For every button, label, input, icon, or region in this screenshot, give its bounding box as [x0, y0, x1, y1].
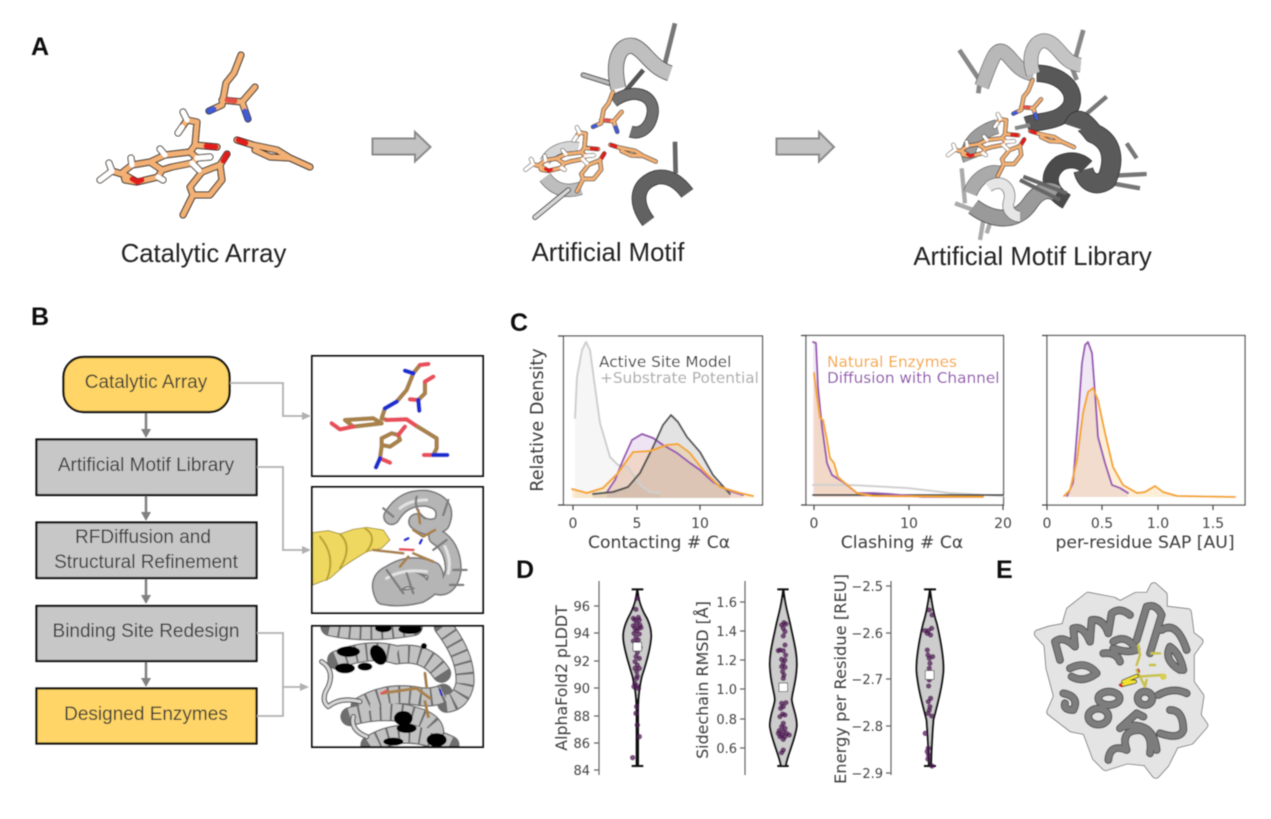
panel A: artificial motif structure — [526, 23, 687, 222]
step: Binding Site Redesign: Binding Site Redesign — [53, 621, 239, 642]
violin: Sidechain RMSD — [693, 581, 797, 775]
step: RFDiffusion and Structural Refinement: Structural Refinement — [54, 552, 239, 573]
step: Binding Site Redesign — [36, 606, 256, 661]
panel label D: D — [516, 556, 534, 584]
step: Catalytic Array — [64, 357, 230, 412]
violin: AlphaFold2 pLDDT: 88 — [573, 710, 590, 725]
chart: Clashing # C-alpha density: 10 — [900, 516, 918, 532]
chart: Clashing # C-alpha density — [801, 336, 1012, 553]
step: Designed Enzymes: Designed Enzymes — [64, 704, 228, 725]
chart: Contacting # C-alpha density: Relative Density — [528, 348, 548, 492]
violin: Sidechain RMSD: Sidechain RMSD [Å] — [693, 601, 712, 759]
violin: Energy per Residue: Energy per Residue [REU] — [831, 574, 850, 784]
step: RFDiffusion and Structural Refinement: RFDiffusion and — [75, 527, 211, 548]
panel label C: C — [510, 309, 528, 337]
violin: AlphaFold2 pLDDT — [552, 581, 651, 779]
chart: Contacting # C-alpha density: Active Site Model — [599, 353, 731, 371]
violin: AlphaFold2 pLDDT: 92 — [573, 655, 590, 670]
inset: designed enzyme ribbon view — [312, 624, 483, 747]
chart: per-residue SAP density — [1042, 336, 1245, 553]
chart: Contacting # C-alpha density: +Substrate Potential — [600, 369, 759, 387]
violin: AlphaFold2 pLDDT: 90 — [573, 682, 590, 697]
violin: Energy per Residue: −2.5 — [851, 580, 883, 595]
panel A: catalytic array molecule — [100, 55, 310, 215]
inset: motif with helix and yellow ligand channel — [312, 487, 483, 613]
violin: Energy per Residue: −2.8 — [851, 720, 883, 735]
chart: per-residue SAP density: 1.0 — [1147, 516, 1169, 532]
chart: per-residue SAP density: per-residue SAP [AU] — [1055, 533, 1235, 553]
violin: Sidechain RMSD: 1.2 — [716, 654, 737, 669]
panel label E: E — [996, 556, 1013, 584]
violin: Energy per Residue: −2.7 — [851, 673, 883, 688]
violin: AlphaFold2 pLDDT: AlphaFold2 pLDDT — [552, 605, 571, 751]
step: Catalytic Array: Catalytic Array — [85, 372, 208, 393]
violin: Sidechain RMSD: 1.0 — [716, 683, 737, 698]
panel A: artificial motif library structure — [948, 30, 1147, 240]
chart: Contacting # C-alpha density: 0 — [569, 516, 577, 532]
chart: Clashing # C-alpha density: 0 — [810, 516, 818, 532]
chart: Contacting # C-alpha density: 5 — [633, 516, 641, 532]
violin: Energy per Residue — [831, 574, 943, 784]
violin: Energy per Residue: −2.9 — [851, 767, 883, 782]
panel B: flowchart — [36, 357, 256, 744]
violin: Sidechain RMSD: 0.6 — [716, 742, 737, 757]
panel label B: B — [31, 303, 49, 331]
violin: Sidechain RMSD: 1.4 — [716, 625, 737, 640]
chart: per-residue SAP density: 0 — [1043, 516, 1051, 532]
violin: AlphaFold2 pLDDT: 84 — [573, 764, 590, 779]
violin: AlphaFold2 pLDDT: 86 — [573, 737, 590, 752]
arrow: array to motif — [372, 132, 430, 162]
step: Designed Enzymes — [36, 688, 256, 744]
chart: Clashing # C-alpha density: Diffusion with Channel — [827, 369, 1000, 387]
caption: Artificial Motif: Artificial Motif — [532, 239, 685, 267]
chart: Clashing # C-alpha density: 20 — [994, 516, 1012, 532]
chart: Clashing # C-alpha density: Natural Enzymes — [827, 353, 957, 371]
chart: per-residue SAP density: 1.5 — [1202, 516, 1224, 532]
arrow: motif to library — [776, 132, 834, 162]
violin: Sidechain RMSD: 0.8 — [716, 713, 737, 728]
violin: Sidechain RMSD: 1.6 — [716, 596, 737, 611]
caption: Catalytic Array: Catalytic Array — [121, 240, 286, 268]
chart: Contacting # C-alpha density: 10 — [691, 516, 709, 532]
inset: catalytic array sticks — [312, 356, 483, 476]
chart: Contacting # C-alpha density: Contacting # Cα — [588, 533, 730, 553]
violin: Energy per Residue: −2.6 — [851, 627, 883, 642]
step: RFDiffusion and Structural Refinement — [36, 522, 256, 578]
chart: per-residue SAP density: 0.5 — [1091, 516, 1113, 532]
panel label A: A — [31, 33, 49, 61]
flow arrows between steps — [141, 412, 151, 687]
panel E: enzyme surface and ribbon structure — [1038, 586, 1204, 775]
chart: Contacting # C-alpha density — [528, 336, 762, 553]
connector arrows to insets — [230, 383, 311, 716]
violin: AlphaFold2 pLDDT: 96 — [573, 600, 590, 615]
chart: Clashing # C-alpha density: Clashing # Cα — [841, 533, 963, 553]
caption: Artificial Motif Library: Artificial Motif Library — [913, 243, 1152, 271]
step: Artificial Motif Library — [36, 440, 256, 495]
step: Artificial Motif Library: Artificial Motif Library — [58, 455, 235, 476]
violin: AlphaFold2 pLDDT: 94 — [573, 627, 590, 642]
